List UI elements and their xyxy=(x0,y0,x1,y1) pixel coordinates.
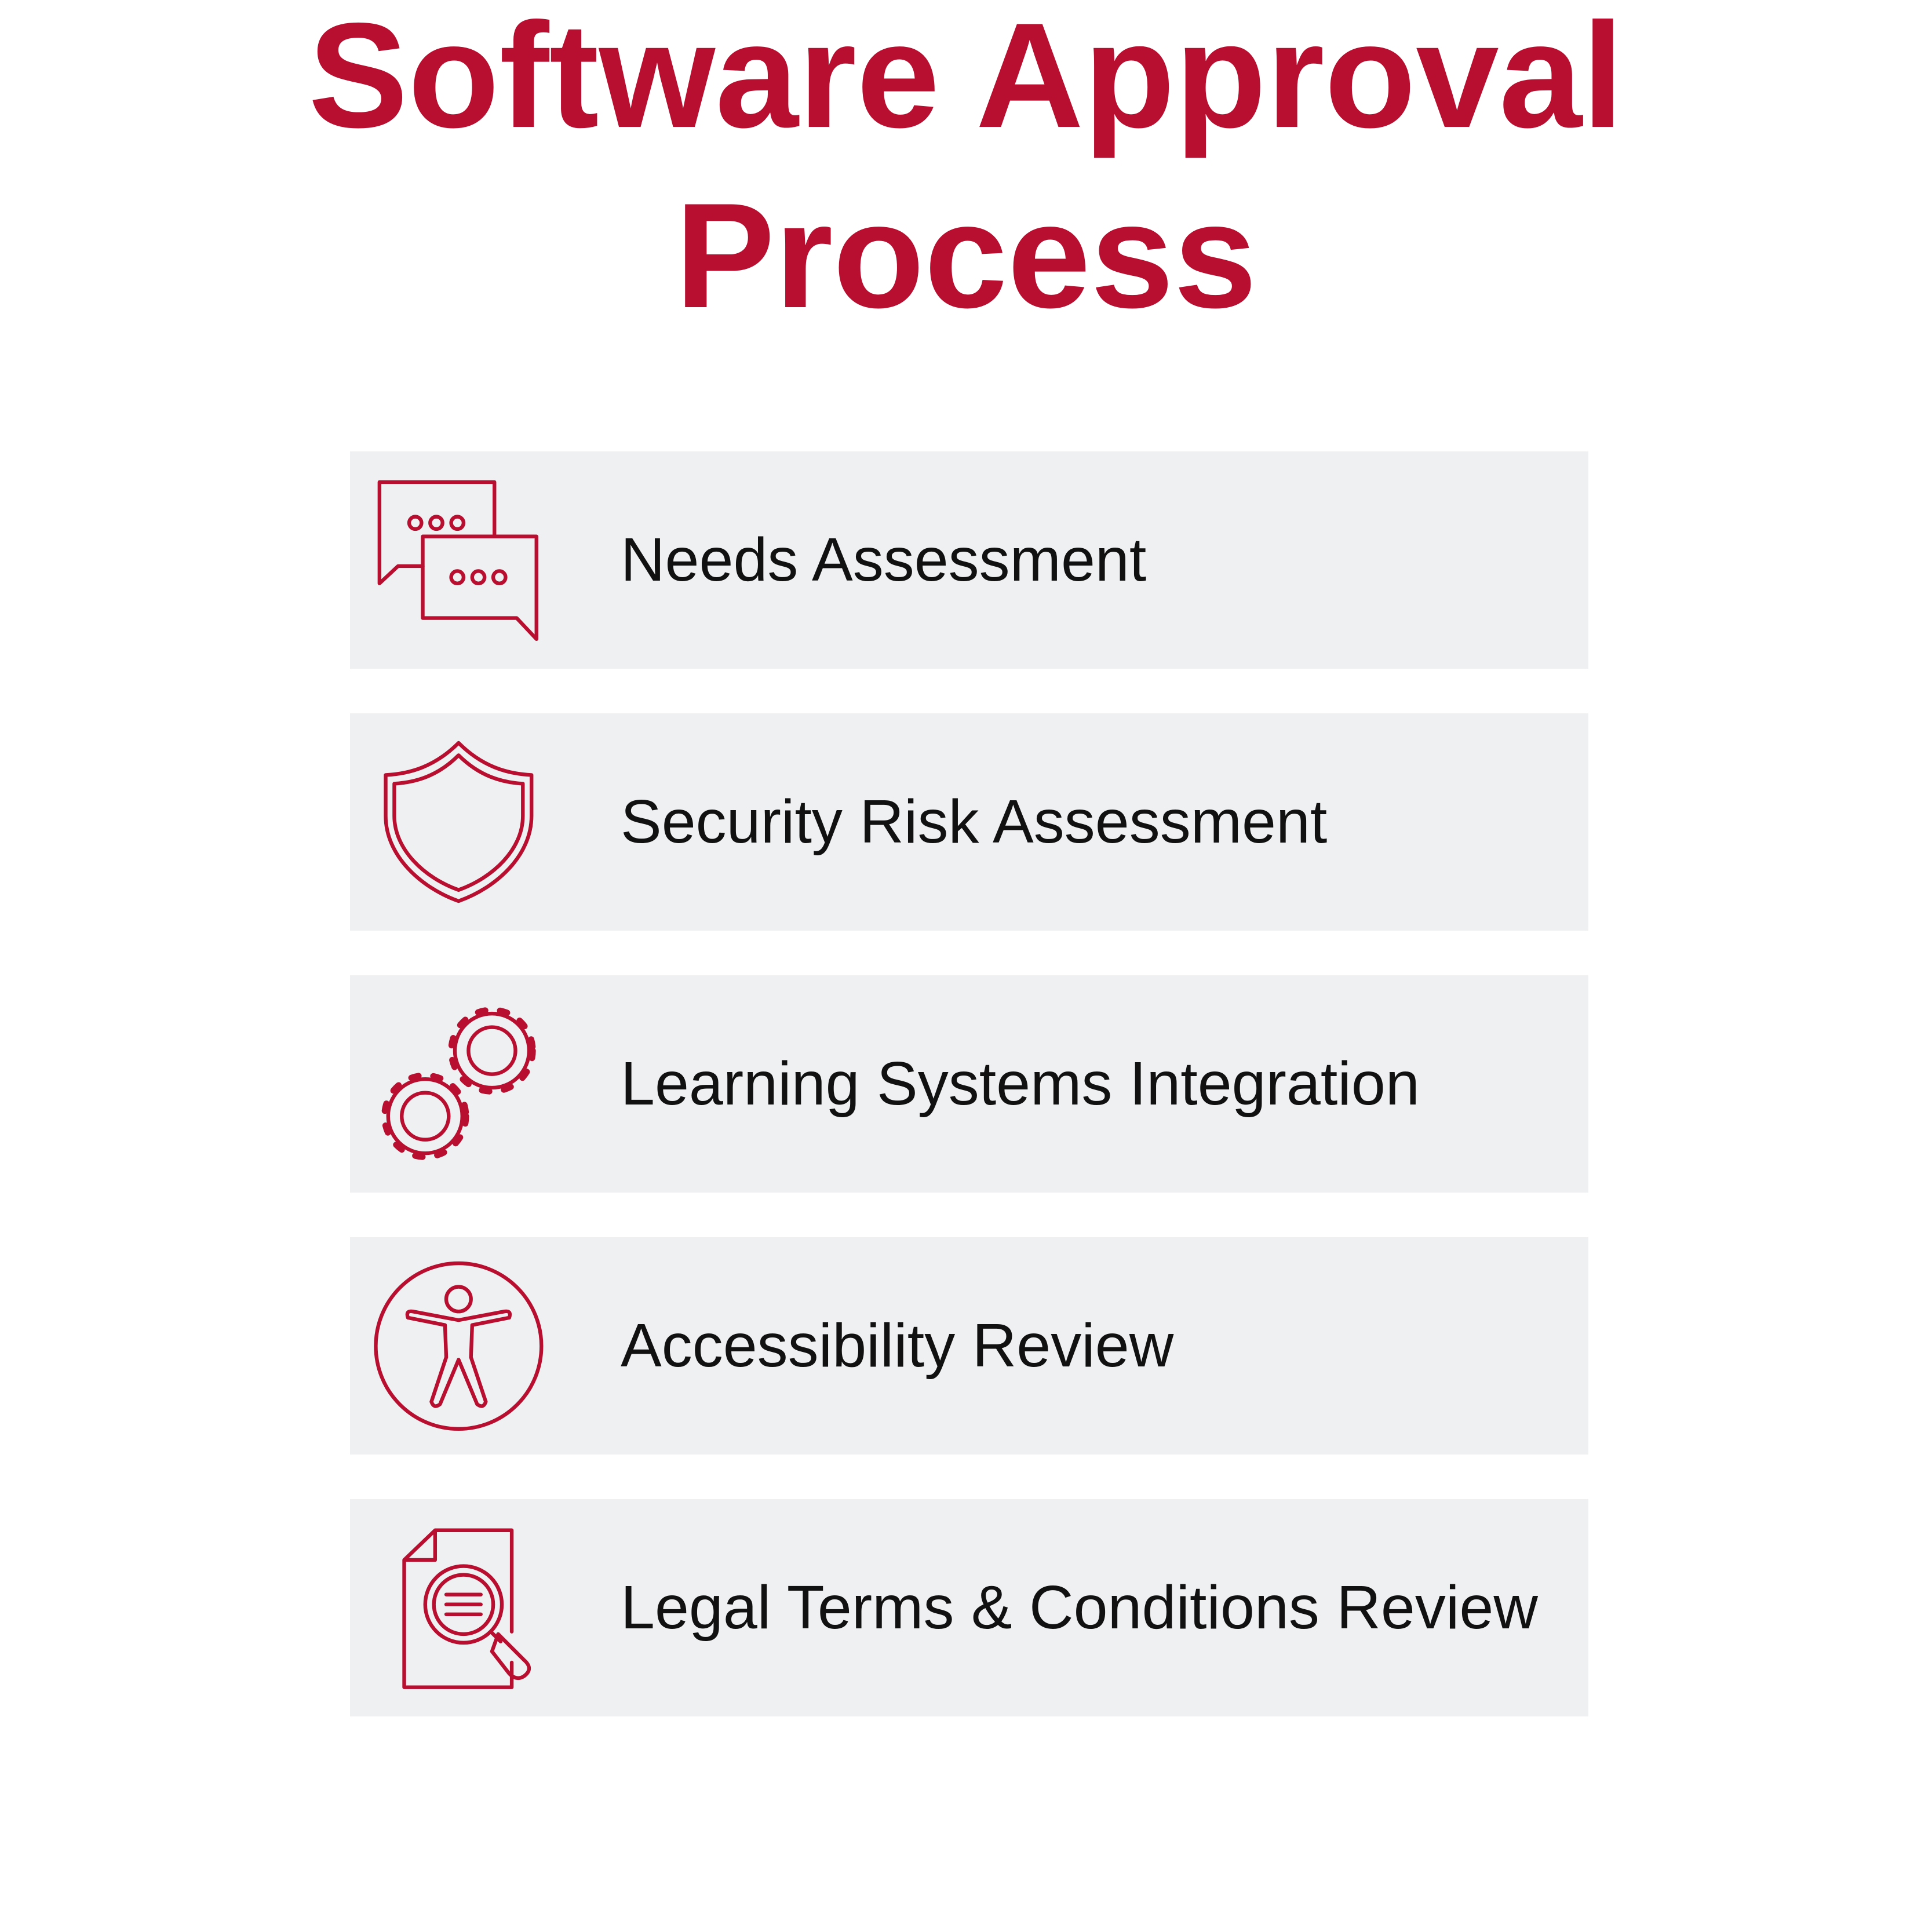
icon: accessibility xyxy=(376,1263,541,1429)
panel: needs assessment xyxy=(350,451,1588,669)
label: needs assessment: Needs Assessment xyxy=(621,526,1146,594)
label: legal terms review: Legal Terms & Conditions Review xyxy=(621,1573,1538,1642)
panel: accessibility review xyxy=(350,1237,1588,1455)
label: accessibility review: Accessibility Review xyxy=(621,1311,1173,1380)
panel: security risk assessment xyxy=(350,713,1588,931)
panel: learning systems integration xyxy=(350,975,1588,1193)
panel: legal terms review xyxy=(350,1499,1588,1716)
icon: chat bubbles xyxy=(380,482,537,639)
label: learning systems integration: Learning Systems Integration xyxy=(621,1049,1420,1118)
title xyxy=(308,0,1624,339)
label: security risk assessment: Security Risk Assessment xyxy=(621,788,1327,856)
icon: shield xyxy=(386,743,531,901)
icon: document with magnifier xyxy=(404,1530,529,1687)
title: Process xyxy=(675,172,1257,339)
icon: gears xyxy=(384,1010,533,1157)
